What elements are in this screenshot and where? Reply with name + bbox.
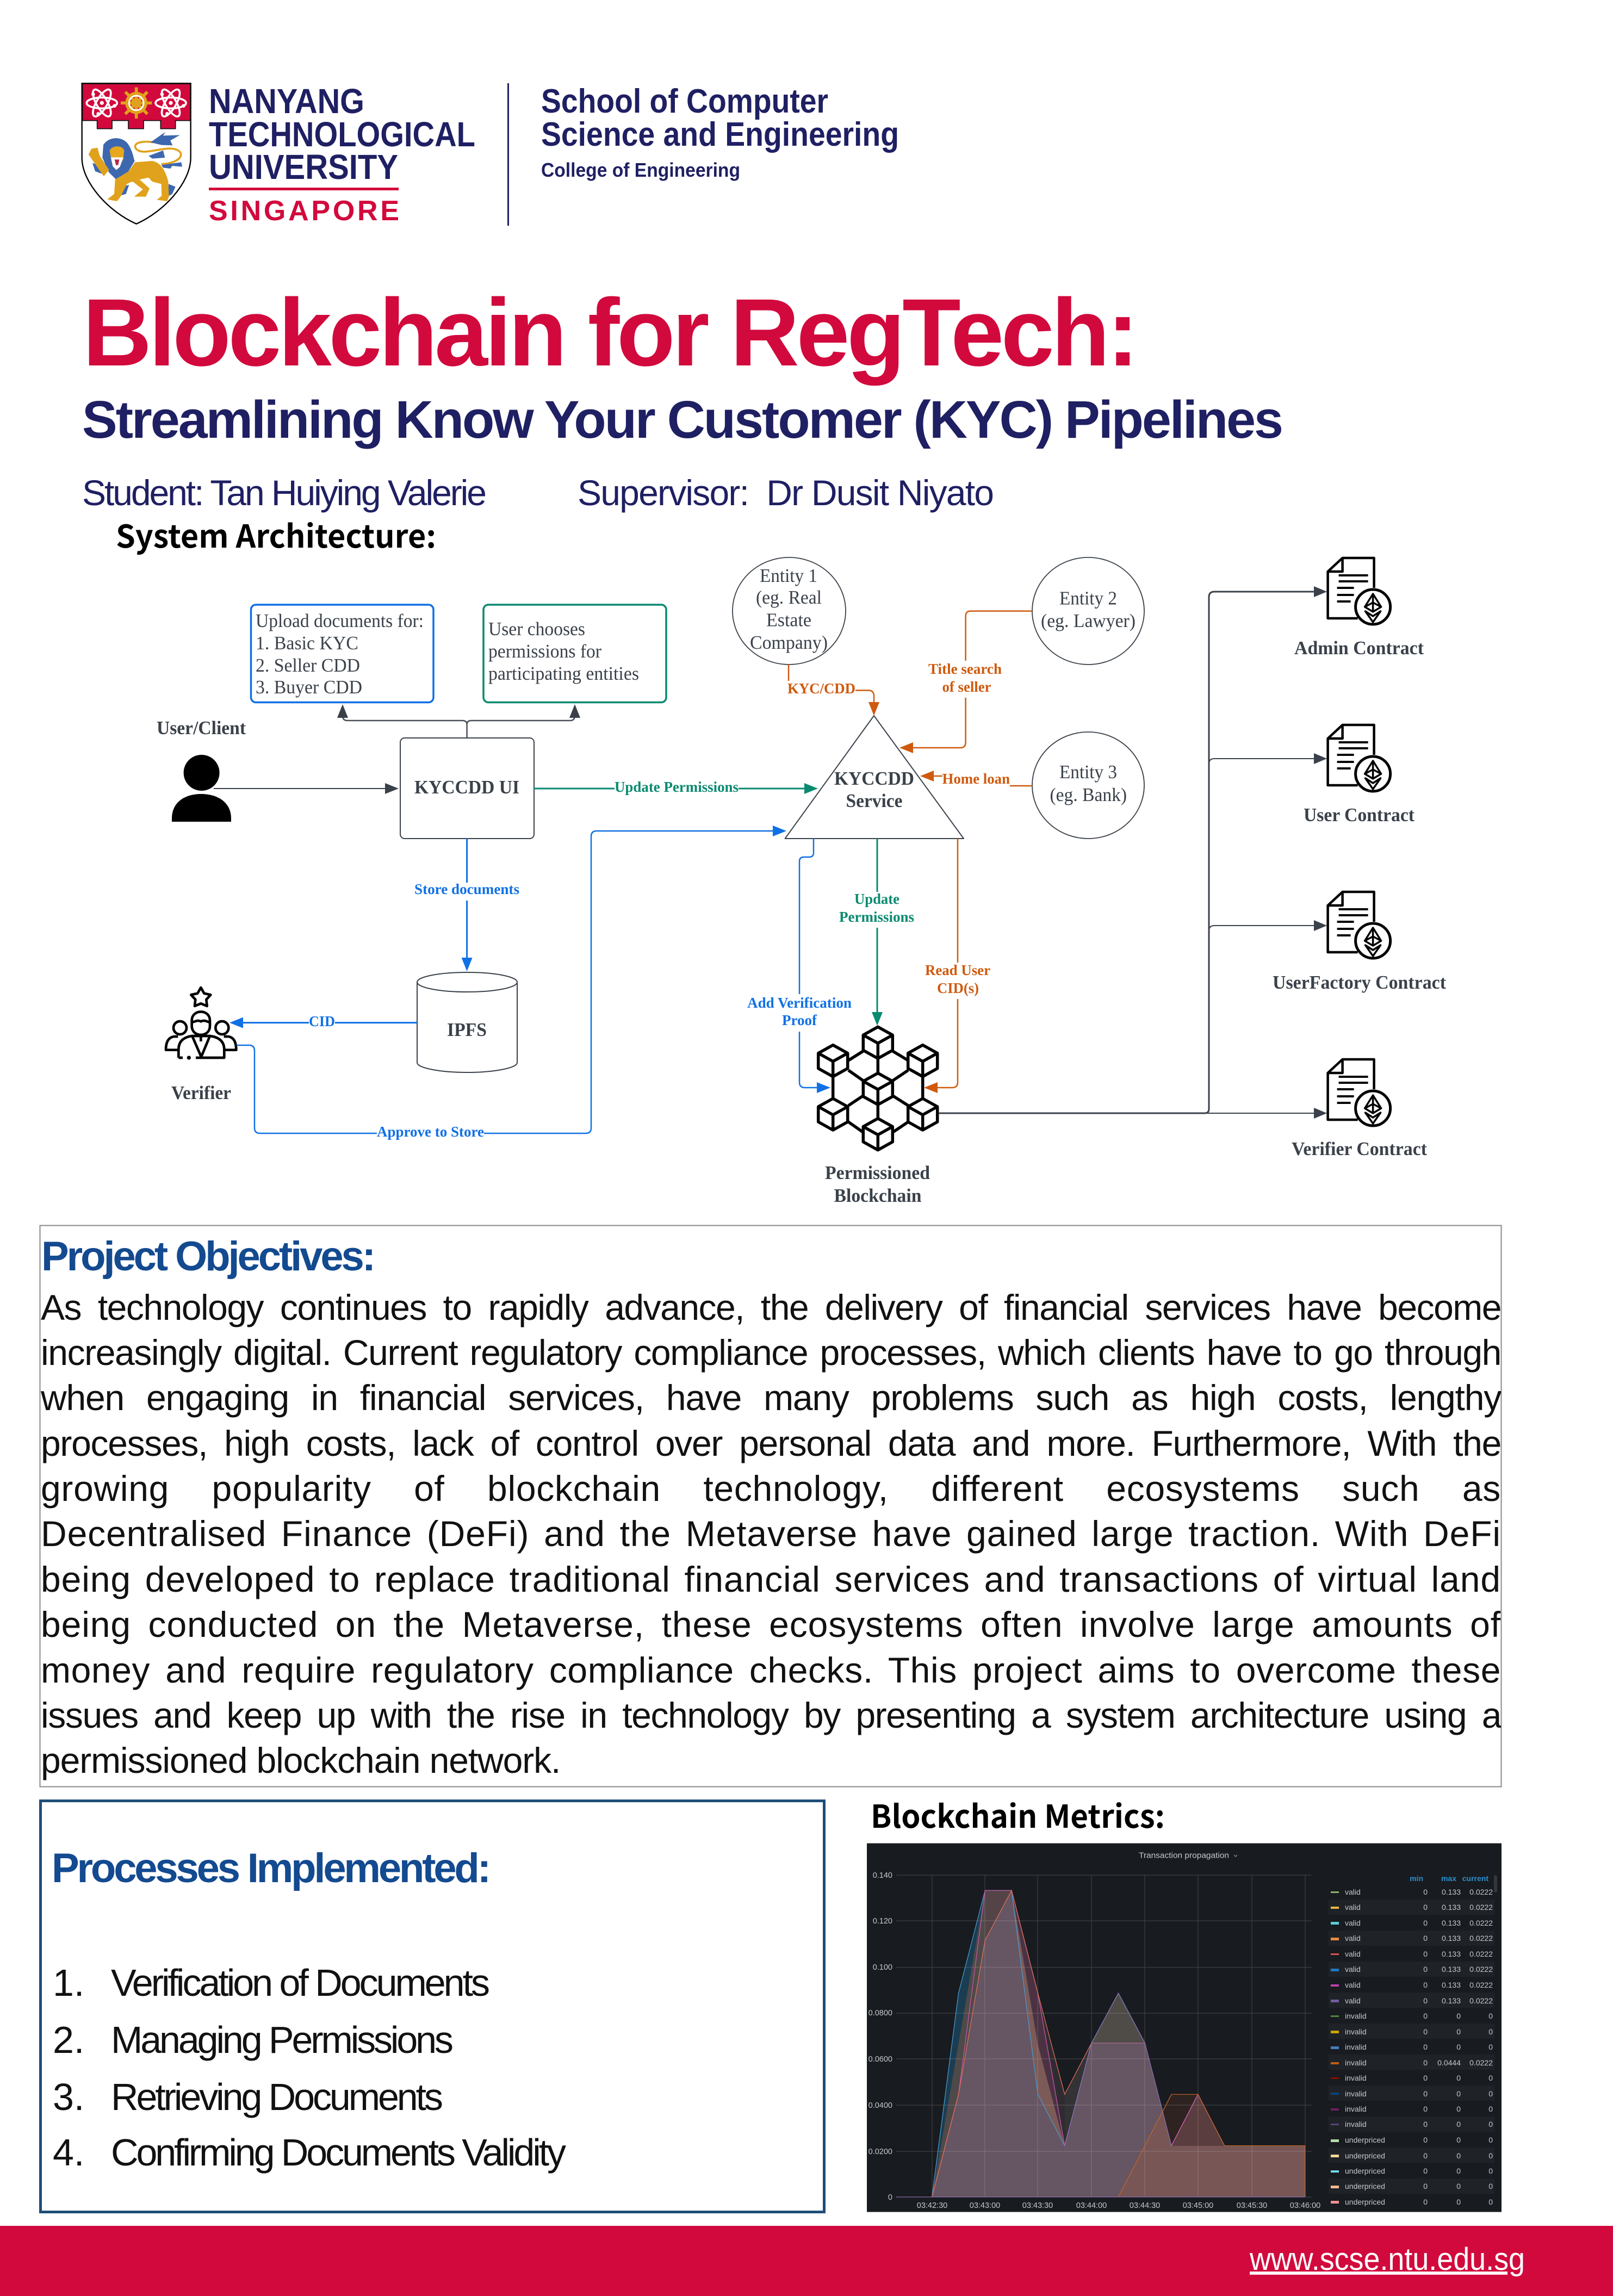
chart legend table: 0 [1423,1919,1428,1927]
chart legend table: 0.0222 [1469,1903,1493,1912]
box: user chooses permissions: permissions for [488,641,601,662]
chart legend table: 0.133 [1442,1981,1461,1989]
text block: project objectives body: Decentralised Finance (DeFi) and the Metaverse have gained large traction. With DeFi [41,1513,1501,1554]
arrow: KYC/CDD [787,665,879,716]
x axis labels: 03:42:30 [917,2201,947,2210]
entity 3: Entity 3 [1059,762,1117,783]
chart legend table: 0 [1488,2198,1493,2206]
process list: Confirming Documents Validity [111,2131,566,2174]
chart legend table: valid [1345,1919,1361,1927]
database: IPFS [417,972,517,1072]
chart legend table: current [1462,1874,1488,1883]
heading: project objectives: Project Objectives: [41,1233,376,1280]
entity 2: Entity 2 [1059,588,1117,609]
label: permissioned blockchain [825,1163,930,1206]
process list: Retrieving Documents [111,2076,443,2118]
chart legend table: 0.0222 [1469,1934,1493,1943]
arrow: title search of seller [899,611,1032,753]
chart legend table: 0 [1488,2167,1493,2175]
chart legend table: underpriced [1345,2198,1385,2206]
entity 3 [1032,732,1144,839]
chart: transaction propagation: Transaction propagation [1139,1851,1229,1860]
x axis labels [917,2201,1320,2210]
arrow: add verification proof: Proof [782,1012,817,1028]
label: verifier: Verifier [171,1083,231,1103]
process list [53,1962,566,2174]
text block: project objectives body: when engaging in financial services, have many problems such as high costs, lengthy [41,1377,1501,1418]
chart legend table: underpriced [1345,2182,1385,2190]
subtitle: Streamlining Know Your Customer (KYC) Pipelines [82,390,1283,449]
contract: verifier [1292,1059,1427,1159]
arrow: update permissions horizontal [534,779,818,795]
y axis labels: 0.100 [873,1963,892,1972]
logo: university wordmark [209,82,475,227]
arrow: update permissions vertical: Update [854,891,899,907]
chart legend table: 0 [1456,2136,1461,2144]
arrow: update permissions vertical [839,839,914,1026]
chart legend table: 0 [1423,1934,1428,1943]
process list: 1. [53,1962,84,2004]
chart legend table: 0 [1456,2151,1461,2160]
contract: userfactory: UserFactory Contract [1273,972,1446,993]
chart legend table: 0 [1456,2120,1461,2129]
arrow: add verification proof [747,839,852,1093]
process list: 2. [53,2019,84,2061]
arrow: KYC/CDD: KYC/CDD [787,680,855,697]
chart legend table: 0.0222 [1469,1888,1493,1896]
contract: user [1304,725,1415,826]
chart legend table: 0 [1488,2012,1493,2020]
chart legend table: invalid [1345,2120,1367,2129]
chart legend table: 0 [1488,2074,1493,2082]
box: upload documents [251,605,433,703]
chart legend table: 0 [1456,2089,1461,2098]
chart legend table: invalid [1345,2058,1367,2067]
chart legend table: invalid [1345,2043,1367,2051]
text block: project objectives body [41,1287,1501,1780]
chart legend table: 0 [1423,2012,1428,2020]
chart legend table: valid [1345,1996,1361,2005]
chart legend table: 0 [1423,1996,1428,2005]
logo: university wordmark: TECHNOLOGICAL [209,115,475,154]
database: IPFS: IPFS [447,1020,487,1040]
arrow: home loan [920,771,1032,787]
chart legend table: 0 [1423,2182,1428,2190]
text block: project objectives body: being developed to replace traditional financial services and transactions of virtual land [41,1559,1501,1599]
box: KYCCDD service: Service [846,791,903,811]
x axis labels: 03:44:30 [1130,2201,1160,2210]
chart legend table: 0 [1456,2167,1461,2175]
chart legend table: valid [1345,1950,1361,1958]
chart legend table: 0.0222 [1469,1996,1493,2005]
chart legend table: underpriced [1345,2151,1385,2160]
logo: university wordmark: NANYANG [209,82,364,121]
supervisor: Supervisor: Dr Dusit Niyato [578,473,994,513]
logo: university wordmark: SINGAPORE [209,195,399,227]
arrow: store documents: Store documents [414,881,519,897]
label: permissioned blockchain: Permissioned [825,1163,930,1183]
text block: project objectives body: As technology continues to rapidly advance, the delivery of financial services have become [41,1287,1501,1327]
chart legend table: 0 [1488,2027,1493,2036]
logo: school name: School of Computer [541,83,828,120]
chart legend table: 0.0222 [1469,1981,1493,1989]
chart legend table: 0 [1488,2120,1493,2129]
logo: school name [541,83,899,181]
chart: transaction propagation [868,1851,1320,2210]
chart legend table: 0.133 [1442,1903,1461,1912]
chart legend table: 0.133 [1442,1996,1461,2005]
entity 2 [1032,557,1144,665]
footer url: www.scse.ntu.edu.sg [1249,2242,1525,2277]
chart legend table: 0 [1488,2136,1493,2144]
chart legend table: invalid [1345,2105,1367,2113]
chart legend table: 0 [1423,1965,1428,1974]
label: permissioned blockchain: Blockchain [834,1186,921,1206]
student: Student: Tan Huiying Valerie [82,473,487,513]
box: upload documents: 2. Seller CDD [256,655,360,676]
contract: verifier: Verifier Contract [1292,1139,1427,1159]
chart legend table: 0 [1423,1950,1428,1958]
process list: 3. [53,2076,84,2118]
arrow: home loan: Home loan [942,771,1010,787]
chart legend table: invalid [1345,2074,1367,2082]
panel: blockchain metrics chart [867,1844,1502,2212]
arrow: approve to store [237,826,786,1140]
chart legend table: 0.0444 [1437,2058,1461,2067]
chart legend table: 0 [1423,2136,1428,2144]
chart legend table: 0 [1423,2120,1428,2129]
entity 2: (eg. Lawyer) [1041,611,1136,631]
chart legend table: 0.0222 [1469,1965,1493,1974]
chart legend table: 0.133 [1442,1919,1461,1927]
icon: verifier [166,988,236,1058]
arrow: update permissions horizontal: Update Permissions [615,779,739,795]
y axis labels [868,1871,892,2202]
process list: Managing Permissions [111,2019,454,2061]
box: user chooses permissions: participating entities [488,663,639,684]
y axis labels: 0.0400 [868,2101,892,2110]
chart legend table: 0 [1456,2198,1461,2206]
arrow: read user CIDs: Read User [925,962,990,978]
chart legend table [1329,1874,1497,2206]
y axis labels: 0.0200 [868,2148,892,2156]
arrow: title search of seller: Title search [928,661,1002,677]
box: upload documents: Upload documents for: [256,611,424,631]
process list: Verification of Documents [111,1962,490,2004]
arrow: store documents [414,839,519,971]
box: user chooses permissions: User chooses [488,619,585,640]
chart legend table: 0 [1423,2167,1428,2175]
text block: project objectives body: permissioned blockchain network. [41,1740,560,1780]
chart legend table: 0 [1423,2198,1428,2206]
chart legend table: 0 [1423,2151,1428,2160]
y axis labels: 0.120 [873,1917,892,1926]
text block: project objectives body: increasingly digital. Current regulatory compliance processes, which clients have to go through [41,1332,1501,1373]
y axis labels: 0.0800 [868,2009,892,2018]
text block: project objectives body: growing popularity of blockchain technology, different ecosystems such as [41,1468,1501,1509]
chart legend table: valid [1345,1903,1361,1912]
box: KYCCDD UI [400,738,534,839]
chart lines [896,1890,1305,2197]
chart legend table: 0 [1423,2043,1428,2051]
chart legend table: invalid [1345,2089,1367,2098]
chart legend table: valid [1345,1934,1361,1943]
chart legend table: 0 [1488,2105,1493,2113]
arrow: read user CIDs: CID(s) [937,980,979,996]
entity 1: Company) [750,632,828,653]
arrow: update permissions vertical: Permissions [839,909,914,925]
chart legend table: 0 [1423,2089,1428,2098]
arrow: read user CIDs [924,839,990,1093]
arrow: user to UI [214,783,399,794]
chart legend table: 0 [1488,2089,1493,2098]
logo: divider [507,83,509,226]
chart areas [932,1890,1305,2197]
x axis labels: 03:43:00 [970,2201,1000,2210]
chart legend table: 0 [1423,1981,1428,1989]
label: user/client: User/Client [157,718,246,739]
text block: project objectives body: money and require regulatory compliance checks. This project aims to overcome these [41,1650,1501,1690]
chart legend table: valid [1345,1965,1361,1974]
chart legend table: 0.0222 [1469,2058,1493,2067]
arrows: blockchain to contracts [939,586,1327,1119]
text block: project objectives body: processes, high costs, lack of control over personal data and more. Furthermore, With the [41,1423,1501,1463]
chart legend table: 0 [1423,1888,1428,1896]
chart legend table: 0.133 [1442,1950,1461,1958]
chart legend table: 0.133 [1442,1888,1461,1896]
chart legend table: 0 [1488,2182,1493,2190]
text block: project objectives body: being conducted on the Metaverse, these ecosystems often involve large amounts of [41,1604,1501,1645]
chart legend table: underpriced [1345,2167,1385,2175]
x axis labels: 03:46:00 [1290,2201,1320,2210]
heading: processes implemented: Processes Implemented: [52,1845,491,1891]
title: Blockchain for RegTech: [83,280,1139,386]
text block: project objectives body: issues and keep up with the rise in technology by presenting a system architecture using a [41,1695,1501,1735]
entity 1: Entity 1 [760,566,817,586]
chart legend table: max [1441,1874,1456,1883]
x axis labels: 03:45:00 [1183,2201,1213,2210]
arrow: approve to store: Approve to Store [377,1124,484,1140]
heading: blockchain metrics: Blockchain Metrics: [871,1791,1165,1837]
chart legend table: 0 [1423,2105,1428,2113]
arrows: UI to option boxes [337,704,580,738]
x axis labels: 03:44:00 [1076,2201,1107,2210]
heading: system architecture: System Architecture: [116,511,436,557]
chart legend table: 0 [1423,1903,1428,1912]
contract: userfactory [1273,892,1446,993]
box: KYCCDD service: KYCCDD [834,768,914,789]
icon: permissioned blockchain network [818,1027,938,1150]
chart legend table: valid [1345,1981,1361,1989]
panel: system architecture diagram [157,557,1446,1206]
icon: user [172,755,231,822]
x axis labels: 03:43:30 [1022,2201,1053,2210]
contract: admin: Admin Contract [1294,638,1424,659]
arrow: CID [229,1013,417,1029]
y axis labels: 0.140 [873,1871,892,1880]
arrow: CID: CID [309,1013,335,1029]
chart legend table: 0 [1423,2074,1428,2082]
chart legend table: 0 [1456,2027,1461,2036]
arrow: add verification proof: Add Verification [747,995,852,1011]
contract: user: User Contract [1304,805,1415,826]
box: upload documents: 3. Buyer CDD [256,677,362,698]
chart legend table: 0.133 [1442,1934,1461,1943]
chart legend table: 0.0222 [1469,1950,1493,1958]
y axis labels: 0.0600 [868,2055,892,2064]
box: KYCCDD UI: KYCCDD UI [414,777,519,798]
box: upload documents: 1. Basic KYC [256,633,358,654]
entity 1 [733,557,846,665]
logo: university wordmark: UNIVERSITY [209,147,398,187]
chart legend table: min [1410,1874,1423,1883]
chart legend table: 0 [1423,2058,1428,2067]
entity 1: (eg. Real [756,587,822,608]
chart legend table: 0.0222 [1469,1919,1493,1927]
logo: school name: College of Engineering [541,159,740,181]
box: KYCCDD service [785,716,964,839]
arrow: title search of seller: of seller [942,679,991,695]
panel: processes implemented [40,1801,824,2212]
chart legend table: underpriced [1345,2136,1385,2144]
chart legend table: 0 [1456,2182,1461,2190]
contract: admin [1294,558,1424,659]
y axis labels: 0 [888,2193,892,2202]
logo: school name: Science and Engineering [541,116,899,153]
panel: project objectives frame [40,1226,1501,1787]
chart grid [896,1875,1312,2197]
chart legend table: 0 [1456,2012,1461,2020]
chart legend table: 0 [1456,2074,1461,2082]
footer bar [0,2226,1613,2296]
chart legend table: 0 [1456,2043,1461,2051]
chart legend table: invalid [1345,2012,1367,2020]
chart legend table: 0 [1456,2105,1461,2113]
entity 3: (eg. Bank) [1050,785,1127,805]
logo: NTU crest [82,83,191,224]
chart legend table: 0 [1488,2043,1493,2051]
box: user chooses permissions [483,605,666,703]
x axis labels: 03:45:30 [1237,2201,1267,2210]
chart legend table: 0 [1423,2027,1428,2036]
chart legend table: 0.133 [1442,1965,1461,1974]
process list: 4. [53,2131,84,2174]
entity 1: Estate [766,610,811,631]
chart legend table: invalid [1345,2027,1367,2036]
chart legend table: 0 [1488,2151,1493,2160]
chart legend table: valid [1345,1888,1361,1896]
